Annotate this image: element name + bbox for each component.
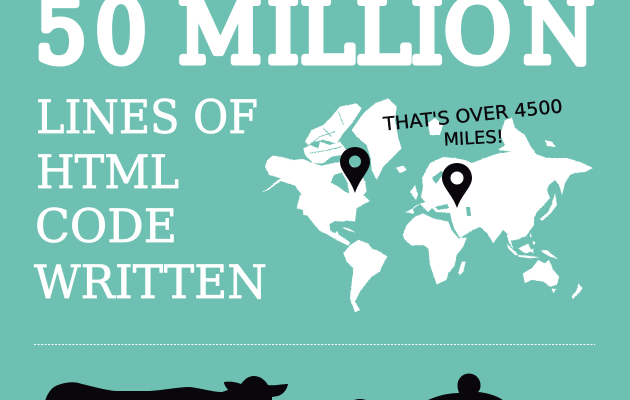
subtitle: lines of HTML code written — [34, 90, 267, 309]
british isles — [410, 185, 418, 200]
subtitle: lines of HTML code written: LINES OF — [36, 90, 258, 144]
pin: europe — [442, 163, 472, 208]
arctic channels — [307, 112, 343, 153]
siberian islands — [545, 140, 556, 147]
svalbard — [428, 118, 443, 135]
callout: distance — [381, 96, 564, 150]
second animal silhouette — [426, 374, 504, 400]
small bump silhouette — [354, 399, 366, 400]
cow silhouette — [45, 376, 288, 400]
arctic canada — [303, 142, 347, 163]
subtitle: lines of HTML code written: HTML — [36, 145, 179, 199]
arctic russia islands — [498, 118, 537, 155]
inland seas — [432, 171, 471, 216]
cuba — [342, 228, 356, 232]
south america — [343, 240, 387, 312]
hudson bay — [331, 172, 349, 193]
dotted divider — [34, 344, 595, 346]
subtitle: lines of HTML code written: WRITTEN — [34, 255, 267, 309]
subtitle: lines of HTML code written: CODE — [35, 199, 177, 253]
pin: north america — [340, 147, 370, 193]
japan — [540, 193, 557, 221]
callout: distance: MILES! — [443, 127, 504, 150]
iceland — [396, 166, 407, 173]
southeast asia, indonesia, australia — [458, 233, 583, 299]
eurasia — [405, 151, 593, 243]
greenland — [352, 98, 402, 180]
north america lower and south america — [297, 195, 467, 312]
callout: distance: THAT'S OVER 4500 — [381, 96, 564, 136]
world map — [261, 98, 593, 312]
north america upper — [261, 98, 407, 222]
africa — [403, 213, 467, 284]
